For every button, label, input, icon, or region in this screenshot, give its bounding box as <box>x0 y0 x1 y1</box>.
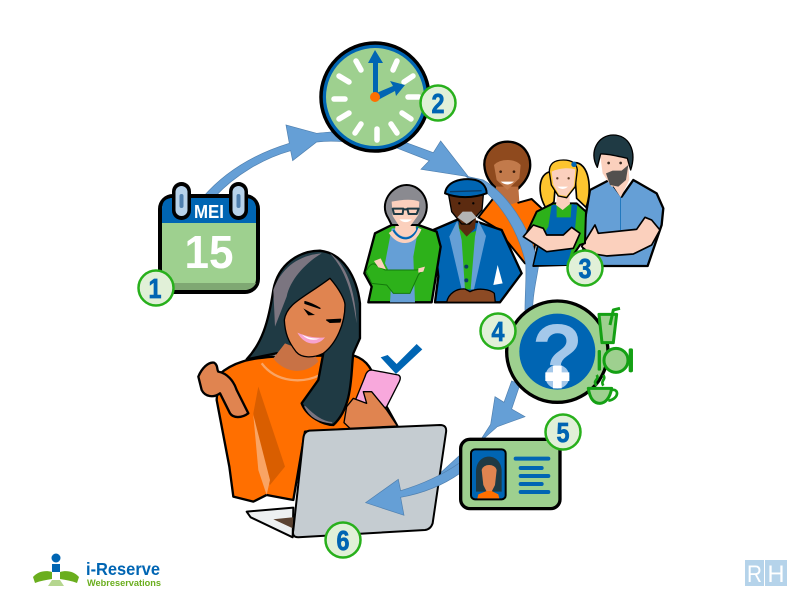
number badge 6 <box>326 522 360 558</box>
icon 1: calendar <box>160 182 258 292</box>
number badge 5: 5 <box>556 417 570 448</box>
watermark: RH: H <box>768 561 784 588</box>
icon 2: clock <box>321 43 429 151</box>
logo: i-Reserve <box>33 554 161 589</box>
question mark: ? <box>532 307 583 400</box>
person: bearded man <box>582 135 663 266</box>
logo tagline: Webreservations <box>87 578 161 589</box>
arrow: calendar to clock <box>203 125 343 197</box>
arrow: clock to team <box>390 137 468 177</box>
person: girl with pigtails <box>523 160 589 266</box>
number badge 2 <box>420 86 456 120</box>
logo mark <box>33 554 79 586</box>
number badge 3: 3 <box>578 253 592 284</box>
number badge 5 <box>546 414 580 450</box>
number badge 1 <box>138 270 174 306</box>
number badge 6: 6 <box>336 525 350 556</box>
number badge 1: 1 <box>148 273 162 304</box>
icon 5: guest ID card <box>461 439 560 509</box>
number badge 4 <box>480 314 516 348</box>
calendar month: MEI <box>194 202 224 222</box>
logo name: i-Reserve <box>86 559 160 579</box>
icon 4: question and menu <box>507 301 633 403</box>
person: woman with afro <box>478 142 542 263</box>
arrow: team to questions <box>465 176 539 310</box>
person: older woman with glasses <box>364 185 441 302</box>
number badge 3 <box>568 250 602 286</box>
person: woman with phone <box>198 251 422 502</box>
arrow: questions to guest details <box>440 381 525 483</box>
watermark: RH <box>745 560 787 588</box>
number badge 2: 2 <box>432 88 444 119</box>
laptop <box>247 425 446 537</box>
calendar day: 15 <box>184 226 234 278</box>
watermark: RH: R <box>747 561 762 588</box>
number badge 4: 4 <box>492 316 505 347</box>
person: older man with cap <box>433 179 522 302</box>
arrow: guest details to laptop <box>366 463 460 515</box>
